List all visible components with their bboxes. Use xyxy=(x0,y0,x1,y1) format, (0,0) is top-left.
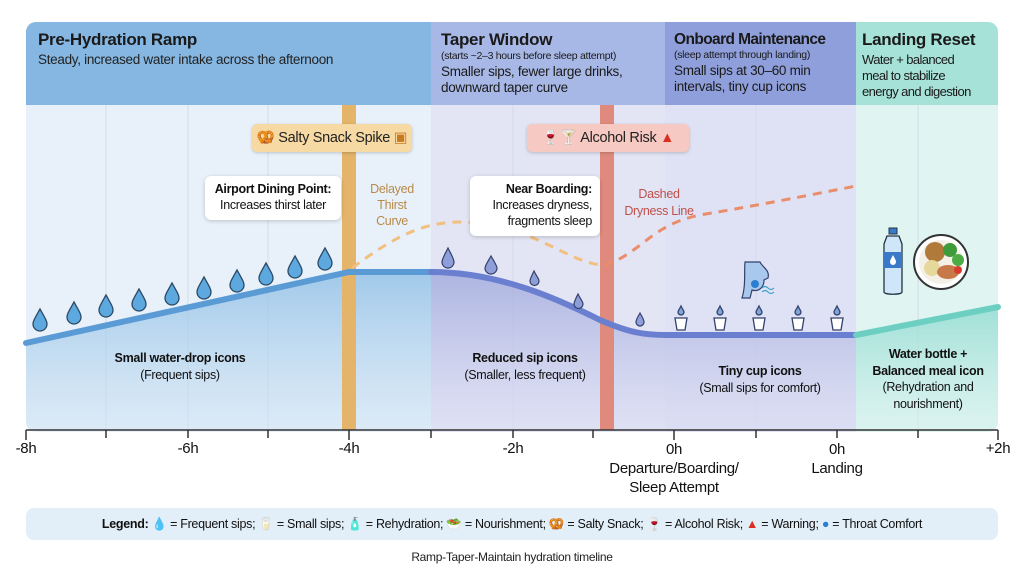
axis labels: -2h xyxy=(503,440,523,457)
label: reduced sip: Reduced sip icons xyxy=(472,351,578,365)
legend: Legend: 💧 = Frequent sips; 🥛 = Small sips; 🧴 = Rehydration; 🥗 = Nourishment; 🥨 = Salty Snack; 🍷 = Alcohol Risk; ▲ = Warning; ● = Throat Comfort xyxy=(102,517,922,531)
caption: Ramp-Taper-Maintain hydration timeline xyxy=(411,550,613,564)
label: bottle and meal: (Rehydration and nourishment) xyxy=(882,380,974,410)
heading: onboard maintenance: (sleep attempt through landing) xyxy=(674,49,810,61)
label: tiny cups xyxy=(699,364,821,395)
axis xyxy=(26,430,998,440)
heading: taper window xyxy=(441,30,622,95)
label: dashed dryness line: Dashed xyxy=(638,187,680,201)
heading: pre-hydration: Steady, increased water intake across the afternoon xyxy=(38,52,333,67)
callout: airport dining: Increases thirst later xyxy=(220,198,326,212)
timeline chart xyxy=(23,22,1001,440)
label: bottle and meal: Water bottle + xyxy=(889,347,967,361)
heading: landing reset xyxy=(862,30,976,99)
label: dashed dryness line: Dryness Line xyxy=(624,204,694,218)
callout: airport dining xyxy=(205,176,341,220)
label: reduced sip xyxy=(464,351,586,382)
icon: throat comfort xyxy=(742,262,774,298)
heading: taper window: Taper Window xyxy=(441,30,552,49)
salty snack band xyxy=(342,105,356,430)
axis labels: -6h xyxy=(178,440,198,457)
callout: airport dining: Airport Dining Point: xyxy=(215,182,331,196)
callout: near boarding xyxy=(470,176,600,236)
hydration curve xyxy=(26,272,998,343)
axis labels: Departure/Boarding/ xyxy=(609,460,739,477)
callout: salty snack spike xyxy=(252,124,412,152)
heading: onboard maintenance: Small sips at 30–60 min intervals, tiny cup icons xyxy=(674,63,810,94)
axis labels: -4h xyxy=(339,440,359,457)
axis labels: 0h xyxy=(666,441,682,458)
label: dashed dryness line xyxy=(624,187,694,218)
heading: onboard maintenance xyxy=(674,31,826,94)
label: tiny cups: (Small sips for comfort) xyxy=(699,381,821,395)
heading: pre-hydration xyxy=(38,30,333,67)
axis labels: -8h xyxy=(16,440,36,457)
heading: landing reset: Landing Reset xyxy=(862,30,975,49)
dryness line xyxy=(604,186,856,265)
reduced sip drops xyxy=(442,248,644,326)
label: delayed thirst curve: Delayed Thirst Curve xyxy=(370,182,414,228)
heading: landing reset: Water + balanced xyxy=(862,52,954,67)
callout: near boarding: fragments sleep xyxy=(508,214,592,228)
callout: near boarding: Near Boarding: xyxy=(506,182,592,196)
label: small water drops: (Frequent sips) xyxy=(140,368,220,382)
label: small water drops: Small water-drop icons xyxy=(115,351,245,365)
heading: taper window: Smaller sips, fewer large drinks, downward taper curve xyxy=(441,64,622,95)
heading: pre-hydration: Pre-Hydration Ramp xyxy=(38,30,197,49)
delayed thirst curve xyxy=(352,222,604,268)
label: small water drops xyxy=(114,351,246,382)
axis labels: 0h xyxy=(829,441,845,458)
axis labels xyxy=(16,440,1010,496)
icon: water bottle xyxy=(884,228,902,294)
label: bottle and meal xyxy=(872,347,984,410)
axis labels: +2h xyxy=(986,440,1010,457)
frequent sip drops xyxy=(33,248,332,331)
label: reduced sip: (Smaller, less frequent) xyxy=(464,368,586,382)
callout: alcohol risk: 🍷🍸 Alcohol Risk ▲ xyxy=(542,130,674,146)
callout: near boarding: Increases dryness, xyxy=(492,198,592,212)
alcohol band xyxy=(600,105,614,430)
callout: salty snack spike: 🥨 Salty Snack Spike ▣ xyxy=(257,130,407,146)
heading: onboard maintenance: Onboard Maintenance xyxy=(674,31,825,48)
axis labels: Sleep Attempt xyxy=(629,479,719,496)
axis labels: Landing xyxy=(811,460,863,477)
heading: landing reset: meal to stabilize xyxy=(862,68,945,83)
icon: balanced meal xyxy=(914,235,968,289)
heading: landing reset: energy and digestion xyxy=(862,84,971,99)
legend xyxy=(26,508,998,540)
label: tiny cups: Tiny cup icons xyxy=(718,364,802,378)
label: bottle and meal: Balanced meal icon xyxy=(872,364,984,378)
callout: alcohol risk xyxy=(527,124,689,152)
heading: taper window: (starts ~2–3 hours before sleep attempt) xyxy=(441,50,616,62)
tiny cups xyxy=(675,306,843,330)
